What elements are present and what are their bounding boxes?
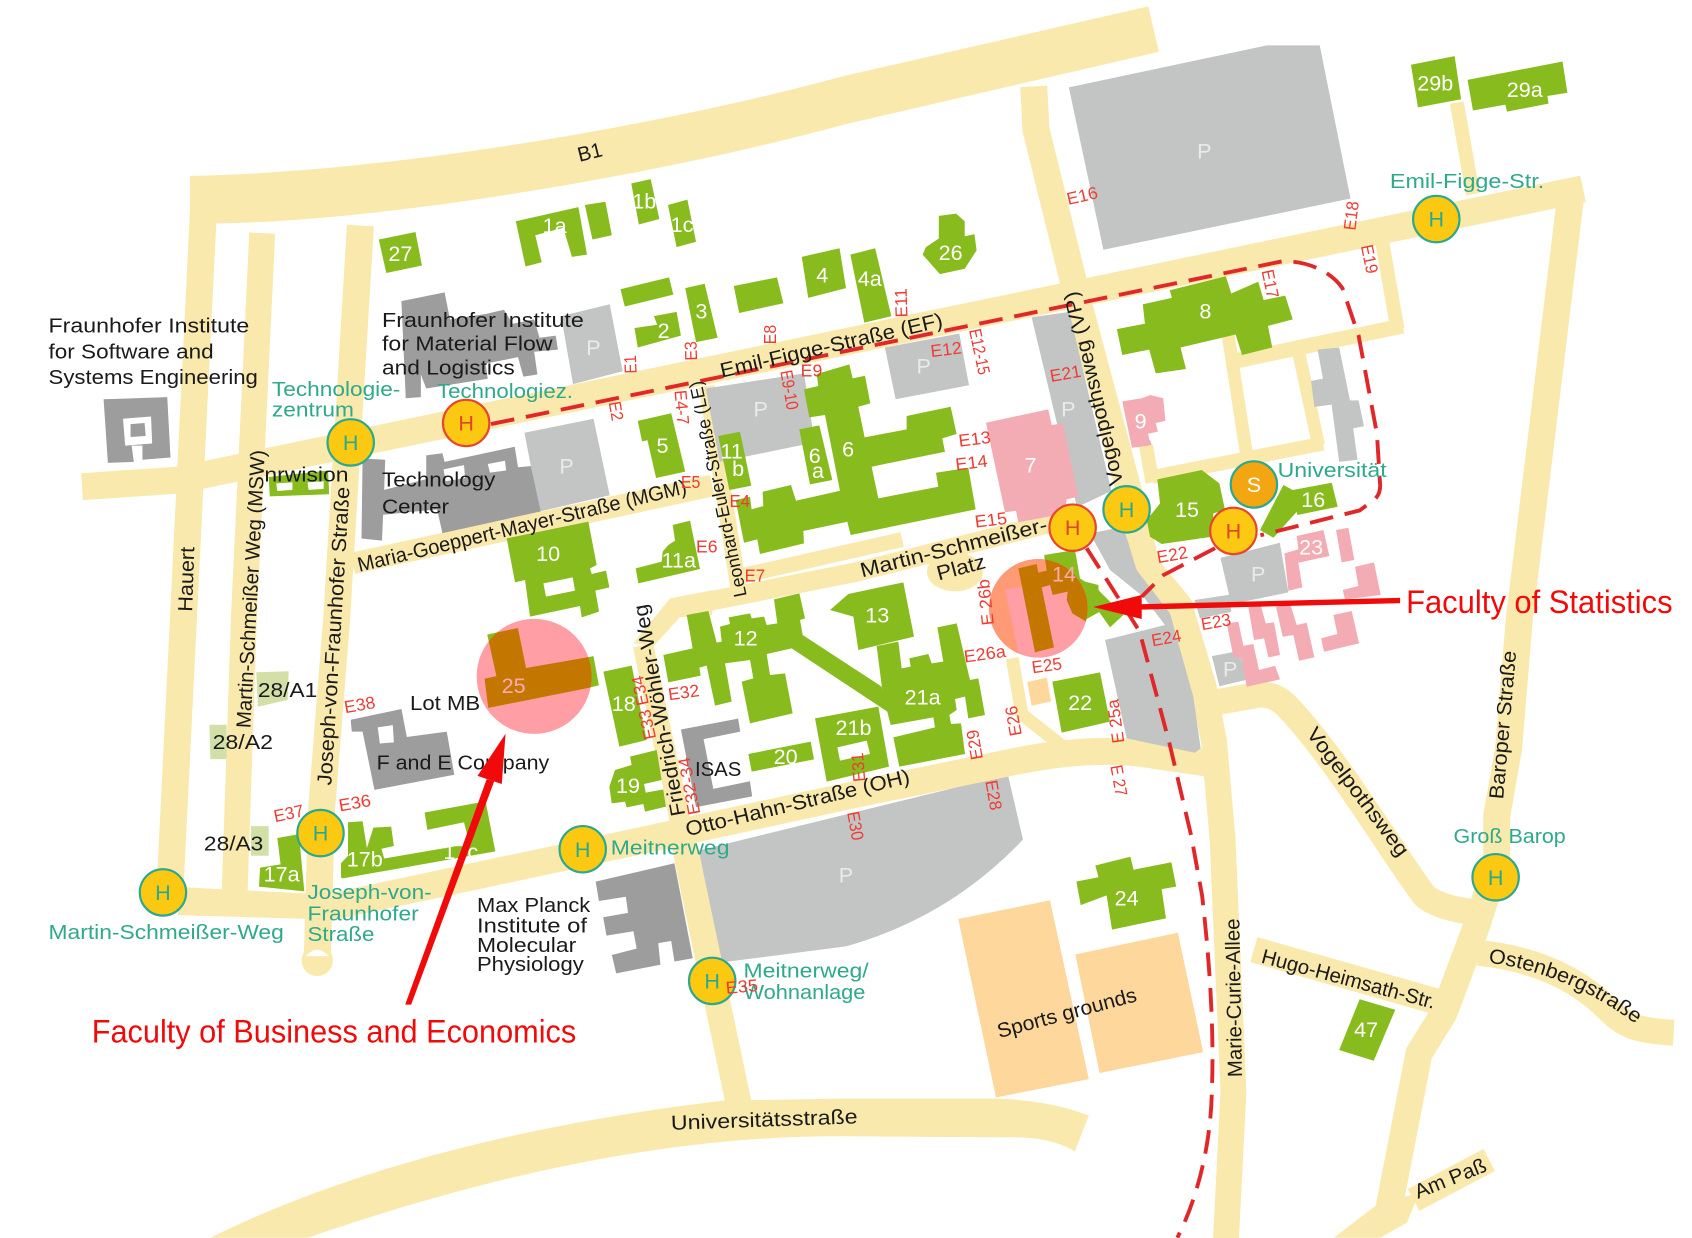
building 6a [799,425,832,484]
parking side strip [1195,595,1231,618]
label 29b: 29b [1417,71,1453,96]
highlight circle: Faculty of Statistics [989,559,1088,658]
building 3 [685,284,718,342]
stop label Martin-Schmeißer-Weg: Martin-Schmeißer-Weg [49,921,284,944]
entrance E12-15: E12-15 [965,327,994,376]
arrow to Faculty of Statistics [1093,595,1400,619]
road: Friedrich-Wöhler-Weg [643,645,680,820]
road label Hauert: Hauert [174,546,199,612]
label 4a: 4a [858,266,882,291]
building 14 green [1044,550,1123,627]
road label Martin-Schmeißer-Platz: Platz [934,550,988,585]
road: Platz blob [927,552,983,591]
arrow to Faculty of Business and Economics [405,734,506,1005]
entrance E25a: E 25a [1102,698,1128,745]
road: Hauert [170,200,204,879]
building 29b [1411,56,1461,107]
building: Technology Center [361,447,541,541]
building 27 [379,232,422,273]
entrance E4: E4 [729,491,750,511]
road label Hugo-Heimsath-Straße: Hugo-Heimsath-Str. [1259,945,1438,1014]
stop marker S-Bahn Universität [1231,461,1277,508]
building 7 [986,409,1078,522]
label 12: 12 [734,625,758,650]
stop marker Universität red: H [1226,518,1241,543]
label 17b: 17b [347,847,383,872]
label 6 stacked: 6 [809,443,821,468]
stop marker Technologiez. red [443,400,489,446]
parking E12 [885,333,969,399]
label 13: 13 [865,603,889,628]
stop marker S-Bahn Universität: S [1247,472,1261,497]
parking letter small: P [1223,657,1237,682]
institute label: software and systems engineering: Fraunhofer Institute [49,314,249,337]
label 21a: 21a [905,685,941,710]
entrance E2: E2 [605,400,628,422]
building 4 [802,248,846,298]
building 17a [259,834,304,891]
building 21a [877,623,985,767]
label 4: 4 [816,263,828,288]
road: Baroper Straße [1388,192,1571,1217]
label Lot MB: Lot MB [410,692,480,715]
stop marker Joseph-von-Fraunhofer: H [313,821,328,846]
label Technology Center [382,469,496,519]
entrance E3: E3 [680,341,701,361]
road label Marie-Curie-Allee: Marie-Curie-Allee [1221,918,1247,1077]
entrance E9-10: E9-10 [776,368,803,411]
parking letter north: P [1197,139,1211,164]
parking north [1069,45,1350,250]
building north of 2 [620,277,673,306]
label 25: 25 [502,673,526,698]
callout Faculty of Business and Economics: Faculty of Business and Economics [92,1013,576,1049]
label 11a: 11a [662,548,696,573]
road label Baroper Straße: Baroper Straße [1485,650,1521,800]
building 8 [1117,276,1293,373]
entrance E7: E7 [745,566,765,586]
road label Friedrich-Wöhler-Weg: Friedrich-Wöhler-Weg [629,603,690,818]
building 6 [736,364,976,554]
building 17b and 17c [341,801,495,878]
stop label Technologiez.: Technologiez. [437,380,573,403]
label 3: 3 [695,298,707,323]
building 15 [1147,470,1225,544]
entrance E30: E30 [843,810,868,842]
entrance E32-34: E32-34 [674,755,704,817]
road label B1: B1 [575,138,605,167]
label 8: 8 [1199,298,1211,323]
label Sports grounds: Sports grounds [995,984,1139,1043]
building 20 [748,742,814,772]
label 16: 16 [1301,487,1325,512]
entrance E29: E29 [962,728,987,761]
route segment south [1087,548,1212,1238]
label 17c: 17c [443,839,478,864]
road: upper link [745,540,902,575]
entrance E12: E12 [929,337,963,361]
stop label Joseph-von-Fraunhofer-Straße [308,881,432,946]
parking letter technology: P [559,454,574,479]
stop marker Martin-Schmeißer-Weg: H [155,880,171,905]
stop marker Wohnanlage: H [704,968,720,993]
road: north link [1034,86,1076,291]
road: to 29b [1457,103,1473,194]
road: Emil-Figge-Straße [82,189,1583,487]
stop label Joseph-von-Fraunhofer-Straße: Fraunhofer [308,902,419,925]
institute label: material flow: and Logistics [382,356,515,379]
parking lots [524,45,1350,686]
label 23: 23 [1299,535,1323,560]
building 1b [631,179,659,224]
road label Vogelpothsweg VP: Vogelpothsweg (VP) [1059,289,1128,488]
building 26 [923,214,977,274]
label 22: 22 [1068,690,1092,715]
road: Vogelpothsweg lower [1209,695,1484,913]
label 1a: 1a [543,213,567,238]
entrance E11: E11 [891,288,912,318]
entrance E22: E22 [1155,542,1189,567]
parking near technology center [524,419,610,511]
building 9 [1122,395,1165,448]
entrance E15: E15 [974,508,1008,532]
building 25 [485,628,599,708]
road: Ostenbergstraße [1478,953,1674,1033]
road label Emil-Figge-Straße: Emil-Figge-Straße (EF) [718,309,945,383]
label 24: 24 [1115,885,1139,910]
entrance E25: E25 [1030,653,1063,677]
callout Faculty of Statistics: Faculty of Statistics [1406,584,1673,620]
stop marker Martin-Schmeißer-Platz red [1049,504,1096,551]
teal stop labels [49,170,1566,1004]
stop marker Martin-Schmeißer-Weg [140,869,186,916]
stop marker Technologiezentrum [328,419,374,466]
label 18: 18 [612,691,636,716]
stop marker Meitnerweg [560,826,606,872]
building: Max Planck Institute [596,863,693,973]
entrance E26a: E26a [962,641,1007,667]
entrance E36: E36 [337,790,372,815]
label a: a [812,458,824,483]
label 2: 2 [658,318,670,343]
building numbers [264,71,1543,1042]
building 28/A1 [256,671,289,707]
road label Martin-Schmeißer Weg: Martin-Schmeißer Weg (MSW) [232,449,270,729]
label 28/A3: 28/A3 [204,832,263,855]
stop marker Wohnanlage [689,958,735,1004]
road: inner horizontal [1228,326,1403,363]
stop marker Martin-Schmeißer-Platz red: H [1065,515,1080,540]
entrance E26: E26 [1001,704,1026,738]
parking lot: Otto-Hahn-Straße [691,775,1023,963]
entrance E17: E17 [1258,268,1283,300]
road: inner lower [1152,444,1323,477]
grey buildings [104,292,1364,973]
sports grounds [958,678,1203,1097]
entrance E24: E24 [1150,625,1183,650]
label 14: 14 [1052,562,1076,587]
label 17a: 17a [264,862,300,887]
label 28/A1: 28/A1 [258,679,317,702]
stop label Technologiezentrum: Technologie- [272,378,400,401]
stop marker Vogelpothsweg: H [1119,497,1134,522]
entrance E14: E14 [954,451,989,474]
label nrwision: nrwision [264,463,349,486]
label 5: 5 [657,433,669,458]
building: Fraunhofer Material Flow [401,292,558,398]
road label Universitätsstraße: Universitätsstraße [671,1105,858,1135]
road: lower link [633,590,712,646]
stop marker Technologiezentrum: H [343,430,359,455]
label 20: 20 [774,744,798,769]
light green buildings 28 [209,671,289,856]
building 18 [603,666,647,747]
building 16 [1260,483,1338,538]
parking small [1212,651,1246,686]
label 47: 47 [1354,1017,1378,1042]
label 29a: 29a [1507,77,1543,102]
institute label: software and systems engineering: Systems Engineering [49,366,258,389]
stop label Joseph-von-Fraunhofer-Straße: Straße [308,923,374,946]
stop label Meitnerweg/Wohnanlage [743,960,869,1004]
building nrwision [269,470,329,496]
building 11a [636,521,700,583]
entrance E27: E 27 [1106,763,1132,798]
sports field left [958,900,1089,1097]
building 24 [1076,857,1176,930]
road label Vogelpothsweg: Vogelpothsweg [1302,723,1414,861]
stop label Universität: Universität [1278,459,1387,482]
building 22 [1052,672,1110,733]
building 12 [663,593,890,723]
stop label Technologiezentrum [272,378,400,422]
label Max Planck Institute: Institute of [477,914,587,937]
label 15: 15 [1175,497,1199,522]
road: Joseph-von-Fraunhofer-Straße [317,226,360,958]
parking central [706,373,815,462]
institute label: material flow: Fraunhofer Institute [382,309,584,332]
road label Am Paß: Am Paß [1411,1154,1490,1204]
road: Maria-Goeppert-Mayer-Straße [353,486,712,563]
road: Martin-Schmeißer Weg [234,233,262,906]
entrance E19: E19 [1357,243,1382,275]
parking letter material flow: P [586,335,601,360]
road: Universitätsstraße [210,1099,1089,1238]
parking letter central: P [754,397,768,422]
entrance E26b: E 26b [973,578,998,626]
building 47 [1339,999,1395,1061]
entrance E13: E13 [957,427,992,451]
stop label Groß Barop: Groß Barop [1454,825,1566,848]
road label Martin-Schmeißer-Platz: Martin-Schmeißer- [858,513,1050,582]
label 9: 9 [1135,408,1147,433]
building beside 1a [585,202,612,240]
shuttle route dashed line [491,261,1380,1238]
stop label Emil-Figge-Str.: Emil-Figge-Str. [1390,170,1544,193]
route segment centre [1142,548,1215,597]
institute label: material flow: for Material Flow [382,333,553,356]
entrance E1: E1 [620,355,641,374]
building 29a [1468,62,1567,112]
stop marker Universität red [1210,508,1257,554]
label 1c: 1c [671,212,694,237]
label 11: 11 [720,439,743,464]
label 6: 6 [842,436,854,461]
building: east grey [1311,347,1364,462]
road label Leonhard-Euler-Straße: Leonhard-Euler-Straße (LE) [685,379,751,599]
parking letter E12: P [917,353,931,378]
road: Am Paß [1414,1160,1489,1200]
buildings east group [1132,440,1381,687]
stop label Joseph-von-Fraunhofer-Straße: Joseph-von- [308,881,432,904]
stop marker Groß Barop [1472,854,1519,901]
entrance E37: E37 [272,800,306,826]
parking strip and lot near Marie-Curie-Allee [1090,527,1201,753]
building: F and E Company [351,709,454,790]
road: inner vertical a [1228,335,1246,453]
label 10: 10 [536,541,560,566]
building 4a [850,248,891,323]
road label Otto-Hahn-Straße: Otto-Hahn-Straße (OH) [683,765,912,841]
entrance E6: E6 [696,536,718,556]
entrance E32: E32 [667,680,701,704]
building 1c [668,200,696,247]
entrance E5: E5 [681,472,700,492]
green buildings [259,56,1567,1061]
institute label: material flow [382,309,584,379]
label Max Planck Institute: Physiology [477,953,585,976]
building 6 and 7 group [718,364,1078,554]
label Max Planck Institute: Max Planck [477,894,591,917]
stop marker Technologiez. red: H [458,411,474,436]
stop label Meitnerweg/Wohnanlage: Meitnerweg/ [743,960,869,983]
road: inner vertical b [1299,355,1319,446]
label Max Planck Institute [477,894,591,976]
institute label: software and systems engineering [49,314,258,389]
entrance E4-7: E4-7 [670,389,693,425]
stop label Meitnerweg/Wohnanlage: Wohnanlage [743,981,865,1004]
label 7: 7 [1025,453,1037,478]
road: Meitnerweg [680,820,739,1106]
label F and E Company: F and E Company [377,751,550,774]
entrance E38: E38 [343,692,377,717]
label Max Planck Institute: Molecular [477,934,576,957]
buildings detailed group (centre) [830,582,1110,767]
label b: b [732,456,744,481]
building 13 [830,582,914,650]
road: Vogelpothsweg upper and Marie-Curie-Allee [1076,291,1233,1238]
label 21b: 21b [836,715,872,740]
buildings detailed group (west centre) [507,521,890,812]
parking letter VP: P [1061,397,1076,422]
stop marker Emil-Figge-Str. [1413,196,1459,242]
building 21b [815,707,889,782]
stop marker Meitnerweg: H [575,837,591,862]
road: near 22 [1012,658,1063,747]
stop label Meitnerweg: Meitnerweg [611,837,729,860]
parking letter 23: P [1251,562,1265,587]
road label Maria-Goeppert-Mayer-Straße: Maria-Goeppert-Mayer-Straße (MGM) [355,476,689,577]
road: Joseph-von-Fraunhofer end cap [302,945,333,976]
entrance E28: E28 [981,778,1006,812]
highlight circle: Faculty of Business and Economics [477,619,599,734]
entrance E18: E18 [1339,200,1363,231]
entrance E35: E35 [725,975,759,998]
label Technology Center: Center [382,496,449,519]
stop label Technologiezentrum: zentrum [272,399,354,422]
label 19: 19 [616,773,640,798]
label Technology Center: Technology [382,469,496,492]
institute label: software and systems engineering: for Software and [49,340,214,363]
stop marker Joseph-von-Fraunhofer [297,810,344,856]
route segment north loop [491,261,1380,535]
parking near material flow institute [561,304,623,384]
stop marker Groß Barop: H [1488,865,1503,890]
entrance E23: E23 [1199,609,1233,634]
entrance E31: E31 [847,752,869,783]
entrance E16: E16 [1065,182,1100,209]
road: Hugo-Heimsath-Straße [1254,950,1451,1006]
entrance E21: E21 [1048,361,1083,386]
road: short vertical [1146,446,1152,482]
bus stops teal [140,196,1519,1004]
building 1a [516,207,587,267]
road label Joseph-von-Fraunhofer-Straße: Joseph-von-Fraunhofer Straße [313,486,355,786]
building 10 [507,522,609,617]
stop marker Emil-Figge-Str.: H [1428,207,1444,232]
road: Otto-Hahn-Straße [308,751,1214,912]
entrance E33 E34: E33 E34 [627,674,660,741]
building 23 [1132,440,1381,687]
building beside 4 [734,277,783,313]
label 28/A2: 28/A2 [213,731,273,754]
building 28/A2 [209,725,227,759]
small field [1027,678,1051,706]
label ISAS: ISAS [695,758,741,781]
road: inner right vertical [1382,243,1397,329]
parking letter Otto-Hahn: P [839,863,853,888]
road: stop link [178,887,324,919]
entrance E8: E8 [760,325,780,344]
road: Leonhard-Euler-Straße [707,386,739,592]
road: B1 [190,6,1159,223]
building 5 [638,413,685,478]
road: Martin-Schmeißer-Platz [678,516,1079,608]
parking Vogelpothsweg [1032,312,1111,507]
stop marker Vogelpothsweg [1103,486,1150,533]
building: ISAS [681,719,752,807]
road: Am Paß junction [1334,1192,1419,1238]
label 1b: 1b [632,188,656,213]
building 28/A3 [251,826,269,856]
label 27: 27 [388,241,412,266]
label 26: 26 [939,240,963,265]
building 11b [718,432,751,490]
entrance E9: E9 [801,361,822,381]
road label Ostenbergstraße: Ostenbergstraße [1490,950,1640,1022]
parking near 23 [1220,543,1288,604]
entrance labels [272,182,1382,998]
building: Fraunhofer Software and Systems Engineering [104,397,170,463]
building 2 [635,312,681,347]
sports field right [1075,933,1203,1073]
building 19 [609,750,666,812]
